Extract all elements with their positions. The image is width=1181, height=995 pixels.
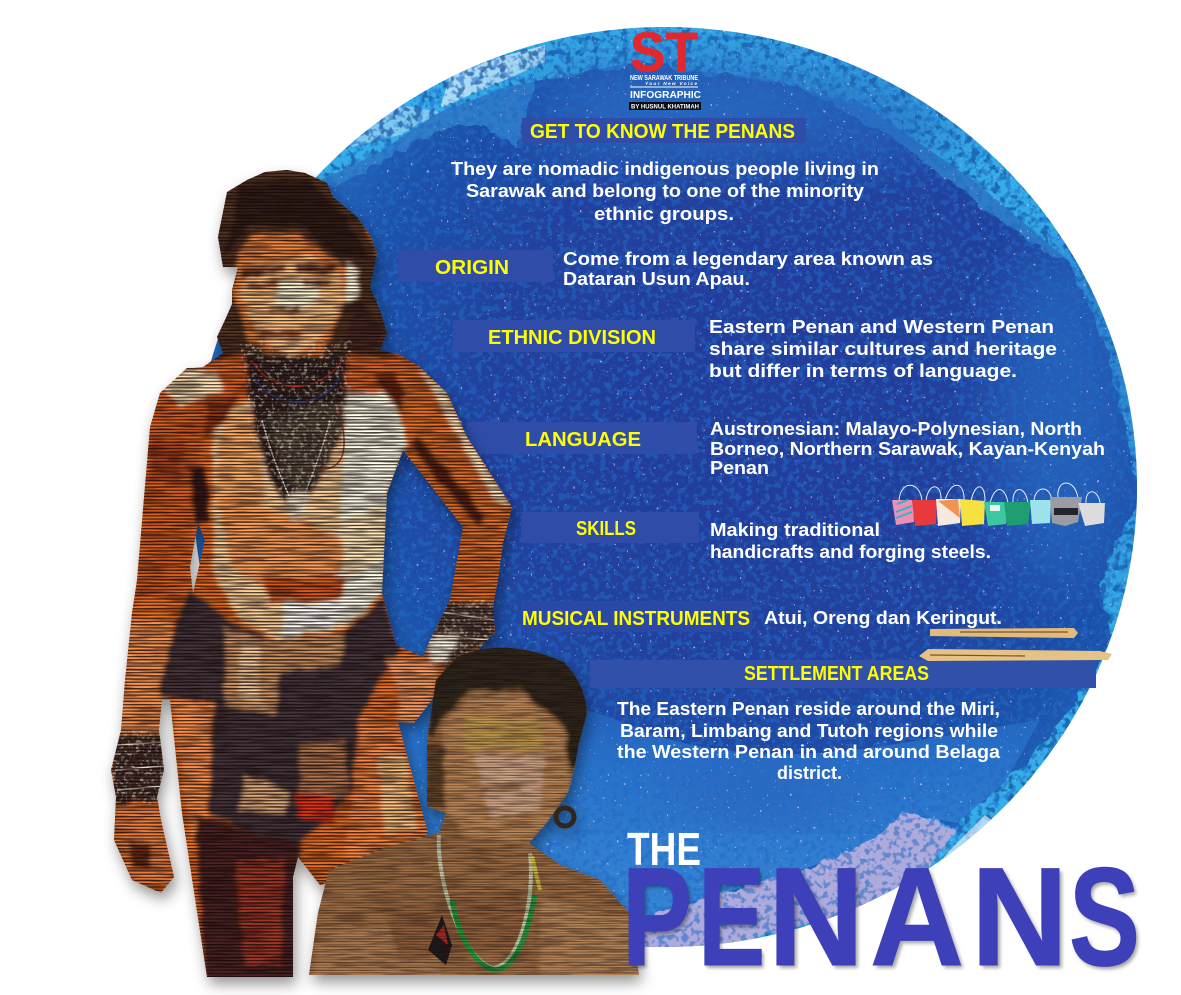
label: ethnic division: ETHNIC DIVISION xyxy=(488,327,656,349)
label: musical instruments xyxy=(521,601,752,632)
text block: language xyxy=(710,418,1105,478)
label: ethnic division xyxy=(453,320,695,352)
logo: New Sarawak Tribune infographic: INFOGRAPHIC xyxy=(630,90,701,101)
title: Penans: N xyxy=(768,838,864,995)
text block: introduction: ethnic groups. xyxy=(594,203,734,224)
title: Penans: P xyxy=(622,838,692,995)
text block: language: Penan xyxy=(710,457,769,478)
label: skills: SKILLS xyxy=(576,518,636,540)
label: settlement areas: SETTLEMENT AREAS xyxy=(744,663,929,685)
title: Penans: A xyxy=(870,838,964,995)
text block: ethnic division: Eastern Penan and Western Penan xyxy=(709,316,1054,337)
text block: introduction xyxy=(451,158,879,224)
title: Penans: N xyxy=(971,838,1068,995)
text block: settlement areas xyxy=(617,698,1001,783)
text block: settlement areas: district. xyxy=(777,762,842,783)
text block: language: Austronesian: Malayo-Polynesian, North xyxy=(710,418,1082,439)
heading: get to know the Penans: GET TO KNOW THE PENANS xyxy=(530,121,795,143)
title: Penans: S xyxy=(1068,838,1139,995)
text block: skills: handicrafts and forging steels. xyxy=(710,541,991,562)
icon: row of woven handicraft bags xyxy=(892,483,1105,526)
text block: introduction: Sarawak and belong to one of the minority xyxy=(466,180,865,201)
text block: origin xyxy=(563,248,933,289)
text block: origin: Dataran Usun Apau. xyxy=(563,268,750,289)
text block: musical instruments: Atui, Oreng dan Keringut. xyxy=(764,607,1002,628)
label: musical instruments: MUSICAL INSTRUMENTS xyxy=(522,608,750,630)
logo: New Sarawak Tribune infographic: BY HUSNUL KHATIMAH xyxy=(631,104,699,110)
text block: ethnic division: share similar cultures and heritage xyxy=(709,338,1057,359)
text block: language: Borneo, Northern Sarawak, Kayan-Kenyah xyxy=(710,438,1105,459)
label: origin: ORIGIN xyxy=(435,257,509,279)
text block: origin: Come from a legendary area known as xyxy=(563,248,933,269)
title: Penans: E xyxy=(698,838,765,995)
text block: settlement areas: The Eastern Penan reside around the Miri, xyxy=(617,698,1000,719)
label: language: LANGUAGE xyxy=(525,429,641,451)
title: Penans xyxy=(622,838,1140,995)
icon: bamboo musical instruments xyxy=(919,628,1112,661)
logo: New Sarawak Tribune infographic: Your New Voice xyxy=(645,81,697,87)
label: settlement areas xyxy=(590,660,1096,688)
logo: New Sarawak Tribune infographic: NEW SARAWAK TRIBUNE xyxy=(630,73,698,82)
label: skills xyxy=(521,512,699,543)
text block: introduction: They are nomadic indigenous people living in xyxy=(451,158,879,179)
text block: settlement areas: the Western Penan in and around Belaga xyxy=(617,741,1001,762)
text block: skills xyxy=(710,519,991,562)
logo: New Sarawak Tribune infographic: ST xyxy=(630,20,698,83)
logo: New Sarawak Tribune infographic xyxy=(629,20,701,110)
panel: watercolour blue circle xyxy=(180,20,1150,960)
title: the: THE xyxy=(627,823,701,875)
label: origin xyxy=(398,250,553,282)
label: language xyxy=(467,422,697,454)
illustration: older Penan person with necklace xyxy=(300,640,645,985)
text block: ethnic division xyxy=(709,316,1057,381)
illustration: standing Penan man xyxy=(100,160,520,990)
text block: skills: Making traditional xyxy=(710,519,880,540)
text block: ethnic division: but differ in terms of language. xyxy=(709,360,1017,381)
text block: settlement areas: Baram, Limbang and Tutoh regions while xyxy=(620,720,998,741)
